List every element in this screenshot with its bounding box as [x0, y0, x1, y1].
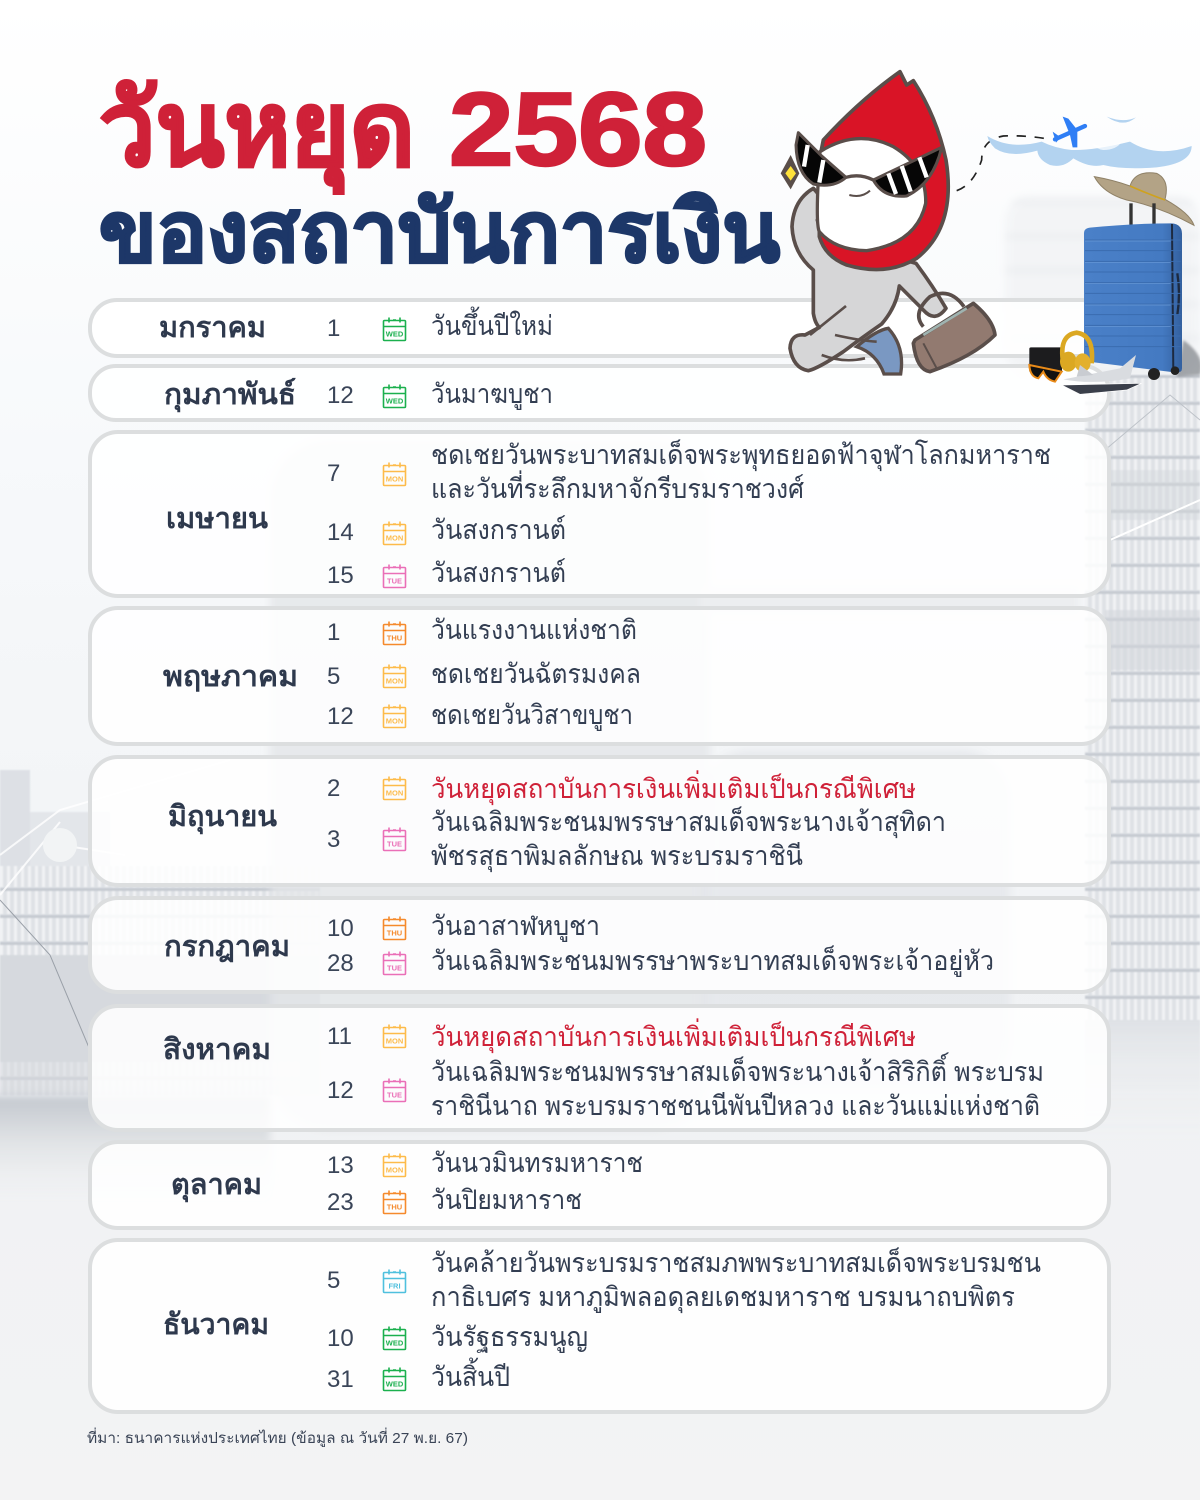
blue leg	[857, 328, 902, 374]
row: 3 June: TUE	[387, 840, 402, 848]
month: July: กรกฎาคม	[164, 931, 290, 963]
row: 5 December: กาธิเบศร มหาภูมิพลอดุลยเดชมหาราช บรมนาถบพิตร	[431, 1282, 1015, 1314]
row: 12 August: 12	[327, 1077, 354, 1104]
row: 28 July: วันเฉลิมพระชนมพรรษาพระบาทสมเด็จพระเจ้าอยู่หัว	[431, 943, 994, 977]
row: 28 July: 28	[327, 950, 354, 977]
row: 5 May: ชดเชยวันฉัตรมงคล	[431, 659, 641, 689]
row: 3 June: วันเฉลิมพระชนมพรรษาสมเด็จพระนางเจ้าสุทิดา	[431, 804, 946, 839]
row: 13 October: MON	[386, 1166, 403, 1174]
source note: ที่มา: ธนาคารแห่งประเทศไทย (ข้อมูล ณ วันที่ 27 พ.ย. 67)	[87, 1427, 468, 1447]
row: 11 August: วันหยุดสถาบันการเงินเพิ่มเติมเป็นกรณีพิเศษ	[431, 1018, 916, 1054]
head	[819, 72, 948, 270]
row: 3 June	[327, 804, 946, 873]
title line 1: วันหยุด	[99, 72, 415, 194]
row: 10 December	[327, 1322, 588, 1353]
row: 7 April: 7	[327, 460, 340, 487]
row: 11 August: MON	[386, 1036, 403, 1046]
handbag	[913, 293, 995, 372]
hat	[1094, 173, 1194, 225]
row: 12 February: วันมาฆบูชา	[431, 379, 553, 410]
row: 14 April: วันสงกรานต์	[431, 514, 566, 545]
row: 10 July	[327, 911, 600, 942]
row: 12 February: 12	[327, 382, 354, 409]
row: 2 June	[327, 770, 916, 806]
row: 23 October	[327, 1185, 582, 1216]
row: 10 July: วันอาสาฬหบูชา	[431, 911, 600, 942]
month: October: ตุลาคม	[171, 1169, 262, 1202]
row: 10 December: วันรัฐธรรมนูญ	[431, 1322, 588, 1353]
row: 5 May: 5	[327, 663, 340, 690]
row: 1 May: THU	[387, 634, 402, 642]
row: 12 August	[327, 1052, 1044, 1121]
panel: December	[90, 1240, 1109, 1412]
row: 28 July: TUE	[387, 964, 402, 972]
row: 31 December: WED	[386, 1380, 404, 1388]
row: 1 May: วันแรงงานแห่งชาติ	[431, 615, 637, 645]
row: 2 June: วันหยุดสถาบันการเงินเพิ่มเติมเป็นกรณีพิเศษ	[431, 770, 916, 806]
panel: October	[90, 1142, 1109, 1228]
panel: April	[90, 432, 1109, 596]
row: 5 May: MON	[386, 676, 403, 686]
panel: June	[90, 757, 1109, 885]
row: 11 August: 11	[327, 1023, 352, 1050]
row: 15 April: TUE	[387, 576, 402, 586]
row: 5 December: 5	[327, 1267, 340, 1294]
row: 23 October: 23	[327, 1189, 354, 1216]
row: 31 December	[327, 1357, 510, 1393]
month: January: มกราคม	[159, 312, 266, 344]
month: May: พฤษภาคม	[163, 661, 298, 693]
row: 1 May	[327, 615, 637, 646]
row: 12 May	[327, 700, 633, 731]
row: 23 October: THU	[387, 1202, 402, 1212]
row: 12 May: MON	[386, 716, 403, 726]
row: 14 April	[327, 514, 566, 546]
row: 3 June: พัชรสุธาพิมลลักษณ พระบรมราชินี	[431, 841, 803, 873]
row: 13 October: วันนวมินทรมหาราช	[431, 1148, 643, 1178]
row: 23 October: วันปิยมหาราช	[431, 1185, 582, 1215]
panel: January	[90, 300, 1109, 356]
row: 15 April	[327, 557, 566, 589]
suitcase	[1177, 340, 1200, 377]
title line 1: 2568	[449, 72, 707, 188]
clouds	[987, 117, 1192, 168]
panel: August	[90, 1006, 1109, 1130]
row: 12 February: WED	[386, 396, 404, 406]
sunglasses	[781, 133, 942, 196]
title line 1	[99, 72, 707, 194]
row: 1 January: WED	[386, 330, 404, 338]
travel scene: plane, clouds, luggage	[957, 117, 1200, 394]
row: 10 December: WED	[386, 1338, 404, 1348]
row: 5 December: FRI	[388, 1282, 401, 1290]
row: 12 May: ชดเชยวันวิสาขบูชา	[431, 700, 633, 731]
row: 15 April: 15	[327, 562, 354, 589]
row: 14 April: MON	[386, 534, 403, 542]
row: 1 May: 1	[327, 619, 340, 646]
airplane	[1053, 117, 1085, 147]
row: 2 June: MON	[386, 788, 403, 798]
mascot: red drop character with sunglasses and bag	[781, 72, 995, 374]
row: 1 January: 1	[327, 315, 340, 342]
row: 10 July: 10	[327, 915, 354, 942]
month: December: ธันวาคม	[163, 1309, 269, 1341]
title line 2: ของสถาบันการเงิน	[99, 185, 780, 279]
row: 12 August: วันเฉลิมพระชนมพรรษาสมเด็จพระนางเจ้าสิริกิติ์ พระบรม	[431, 1052, 1044, 1087]
row: 31 December: วันสิ้นปี	[431, 1357, 510, 1392]
row: 12 August: TUE	[387, 1090, 402, 1100]
row: 10 July: THU	[387, 928, 402, 938]
row: 7 April	[327, 437, 1051, 504]
row: 12 February	[327, 379, 553, 410]
row: 5 May	[327, 659, 641, 690]
row: 1 January: วันขึ้นปีใหม่	[431, 306, 553, 341]
panel: May	[90, 608, 1109, 744]
row: 13 October: 13	[327, 1152, 354, 1179]
row: 14 April: 14	[327, 519, 354, 546]
camera	[1029, 347, 1062, 372]
row: 3 June: 3	[327, 826, 340, 853]
panel: February	[90, 366, 1109, 420]
row: 5 December: วันคล้ายวันพระบรมราชสมภพพระบาทสมเด็จพระบรมชน	[431, 1245, 1041, 1278]
row: 12 August: ราชินีนาถ พระบรมราชชนนีพันปีหลวง และวันแม่แห่งชาติ	[431, 1091, 1040, 1121]
sunglasses	[1029, 365, 1062, 382]
month: February: กุมภาพันธ์	[164, 377, 296, 412]
row: 12 May: 12	[327, 703, 354, 730]
row: 1 January	[327, 306, 553, 342]
row: 2 June: 2	[327, 775, 340, 802]
row: 7 April: MON	[386, 474, 403, 484]
row: 7 April: และวันที่ระลึกมหาจักรีบรมราชวงศ์	[431, 470, 804, 504]
dashed flight path	[957, 136, 1050, 191]
toy plane and passport	[1062, 355, 1142, 394]
row: 11 August	[327, 1018, 916, 1054]
body and arms	[790, 188, 946, 371]
month: August: สิงหาคม	[163, 1034, 271, 1066]
row: 31 December: 31	[327, 1366, 354, 1393]
panel: July	[90, 898, 1109, 992]
row: 7 April: ชดเชยวันพระบาทสมเด็จพระพุทธยอดฟ้าจุฬาโลกมหาราช	[431, 437, 1051, 472]
row: 15 April: วันสงกรานต์	[431, 557, 566, 588]
headphones	[1060, 333, 1092, 372]
month: June: มิถุนายน	[168, 801, 277, 834]
month: April: เมษายน	[166, 503, 268, 535]
row: 10 December: 10	[327, 1325, 354, 1352]
face	[817, 139, 926, 251]
row: 13 October	[327, 1148, 643, 1179]
row: 5 December	[327, 1245, 1041, 1314]
